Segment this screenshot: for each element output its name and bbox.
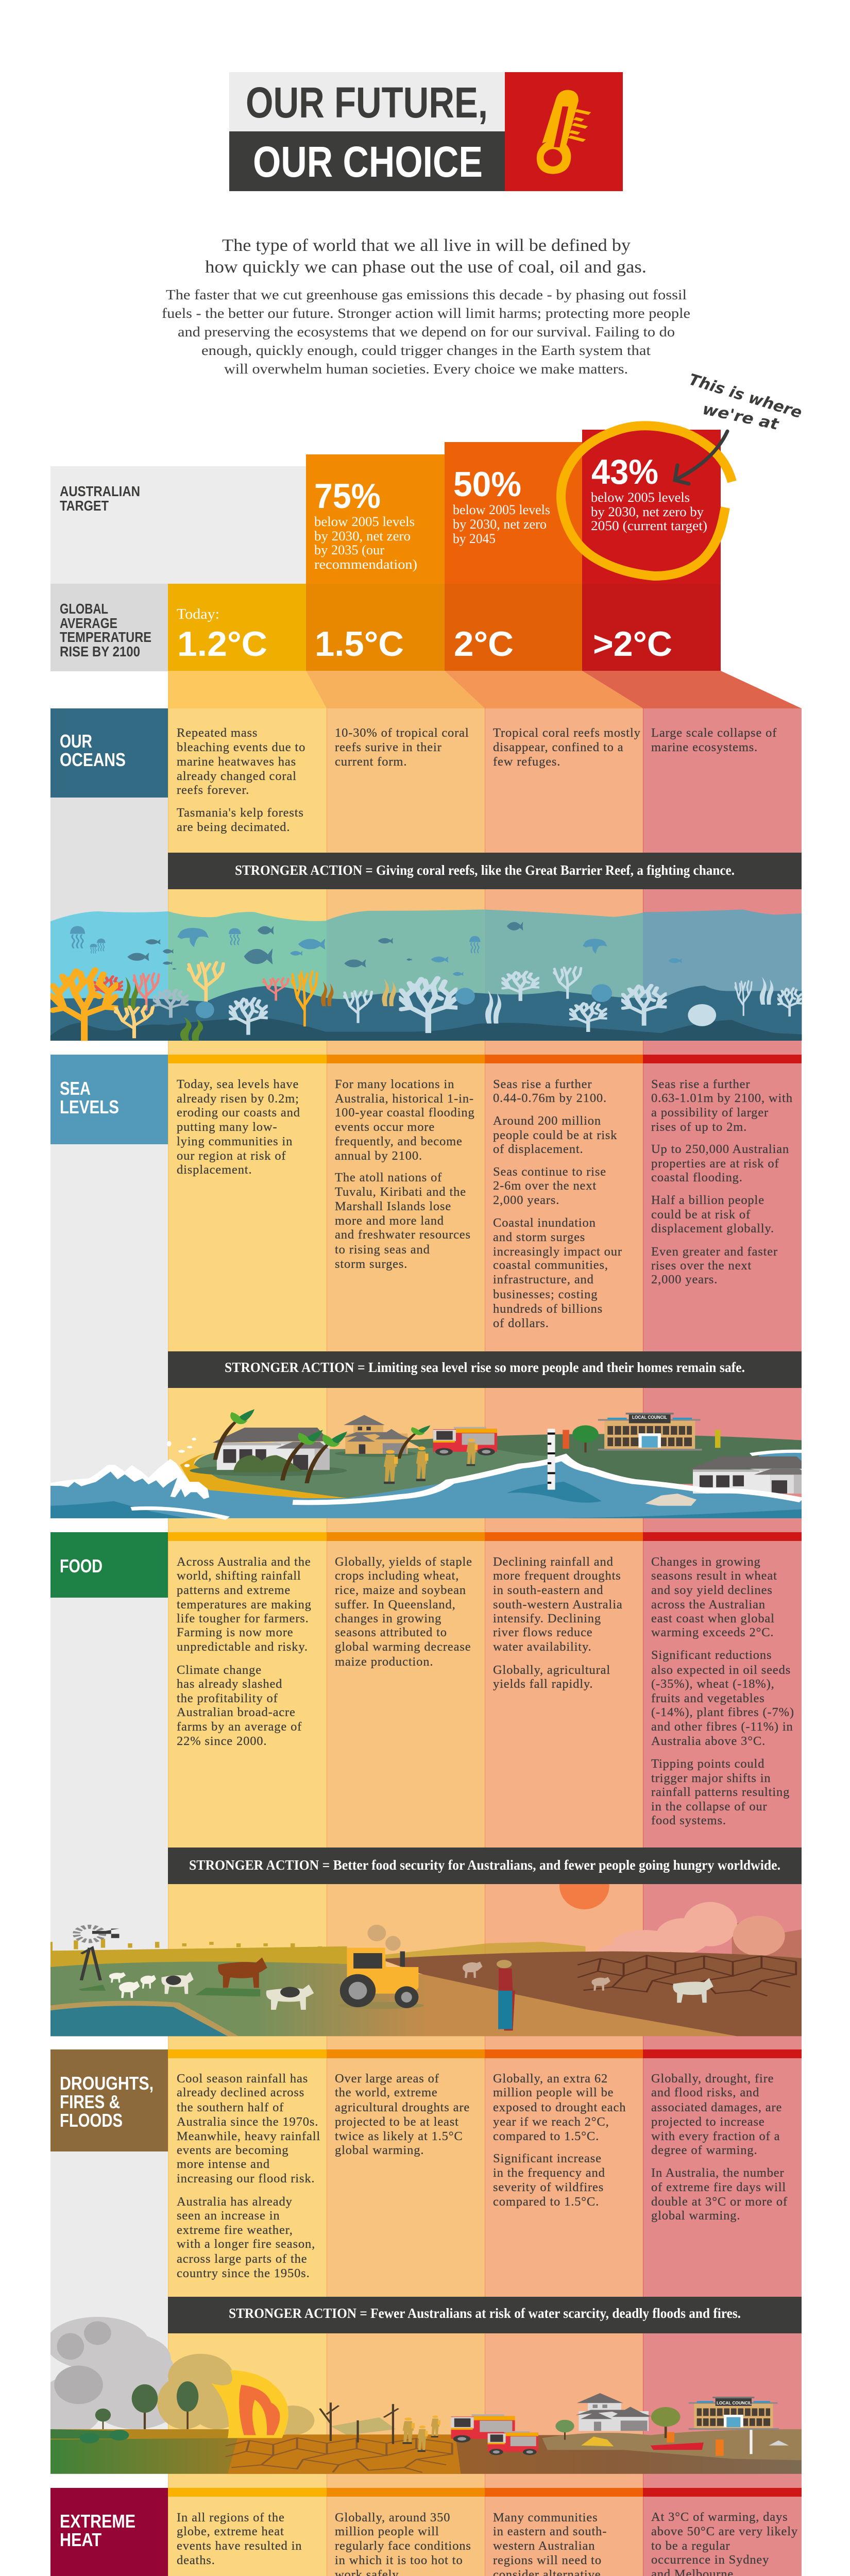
text: oceans today: Repeated mass — [177, 726, 258, 740]
sign: local council: LOCAL COUNCIL — [717, 2401, 752, 2405]
text: sea 1.5: and freshwater resources — [335, 1228, 471, 1242]
text: oceans 2: disappear, confined to a — [493, 740, 623, 754]
text: sea 2: increasingly impact our — [493, 1245, 622, 1259]
text: food above 2: (-14%), plant fibres (-7%) — [651, 1705, 794, 1719]
text: droughts 1.5: twice as likely at 1.5°C — [335, 2129, 463, 2143]
text: food above 2: Significant reductions — [651, 1648, 772, 1662]
text: droughts 1.5: global warming. — [335, 2143, 424, 2157]
text: heat 1.5: million people will — [335, 2524, 439, 2538]
panel: sea levels label: SEA — [60, 1078, 91, 1099]
text: food today: Climate change — [177, 1663, 262, 1677]
text: food 1.5: seasons attributed to — [335, 1625, 447, 1639]
text: droughts above 2: of extreme fire days will — [651, 2180, 786, 2194]
text: droughts above 2: global warming. — [651, 2209, 740, 2223]
text: droughts today: the southern half of — [177, 2100, 284, 2114]
stronger action bar: oceans — [168, 853, 802, 889]
panel: extreme heat label: HEAT — [60, 2529, 101, 2550]
text: sea today: lying communities in — [177, 1134, 293, 1148]
text: sea above 2: Even greater and faster — [651, 1245, 778, 1259]
text: sea 1.5: Australia, historical 1-in- — [335, 1092, 474, 1106]
text: droughts 1.5: Over large areas of — [335, 2072, 439, 2086]
temperature values: 2°C — [454, 624, 514, 664]
intro heading: how quickly we can phase out the use of coal, oil and gas. — [205, 258, 647, 277]
text: droughts above 2: Globally, drought, fire — [651, 2072, 774, 2086]
target: 75%: below 2005 levels — [314, 514, 415, 529]
text: sea 2: 0.44-0.76m by 2100. — [493, 1091, 607, 1105]
target: 50%: below 2005 levels — [453, 502, 550, 517]
illustration: farm to drought — [50, 1884, 802, 2036]
text: oceans today: bleaching events due to — [177, 740, 305, 754]
target: 50%: 50% — [453, 465, 521, 504]
text: food 1.5: maize production. — [335, 1655, 433, 1669]
text: droughts today: with a longer fire season, — [177, 2237, 315, 2251]
text: sea 2: Seas continue to rise — [493, 1165, 606, 1179]
text: sea 1.5: to rising seas and — [335, 1243, 430, 1257]
text: sea 1.5: frequently, and become — [335, 1134, 463, 1148]
panel: our oceans label: OCEANS — [60, 749, 126, 770]
text: heat 1.5: regularly face conditions — [335, 2539, 471, 2553]
text: sea above 2: rises over the next — [651, 1259, 752, 1273]
text: droughts 2: Significant increase — [493, 2151, 602, 2165]
intro heading: The type of world that we all live in will be defined by — [222, 236, 631, 255]
target: 43%: 2050 (current target) — [591, 518, 707, 533]
target: 43% — [591, 452, 707, 533]
text: food 1.5: global warming decrease — [335, 1640, 471, 1654]
text: droughts today: events are becoming — [177, 2143, 289, 2157]
text: droughts today: more intense and — [177, 2157, 270, 2171]
stronger action bar: food: STRONGER ACTION = Better food security for Australians, and fewer people going hungry worldwide. — [189, 1857, 780, 1873]
text: oceans 2: few refuges. — [493, 755, 560, 769]
target: 75% — [314, 477, 417, 572]
text: food today: Australian broad-acre — [177, 1705, 296, 1719]
text: sea today: displacement. — [177, 1163, 252, 1177]
text: sea 2: of dollars. — [493, 1316, 549, 1330]
temperature values: 1.2°C — [177, 624, 267, 664]
panel: droughts fires floods label: FIRES & — [60, 2091, 120, 2112]
text: food 1.5: rice, maize and soybean — [335, 1583, 466, 1597]
stronger action bar: sea levels — [168, 1351, 802, 1388]
text: droughts above 2: and flood risks, and — [651, 2086, 759, 2099]
text: sea 2: infrastructure, and — [493, 1273, 594, 1286]
text: heat above 2: At 3°C of warming, days — [651, 2510, 788, 2524]
text: droughts 2: million people will be — [493, 2086, 614, 2099]
text: oceans 2: Tropical coral reefs mostly — [493, 726, 641, 740]
text: oceans 1.5: 10-30% of tropical coral — [335, 726, 469, 740]
text: droughts 2: in the frequency and — [493, 2166, 605, 2180]
text: food 2: in south-eastern and — [493, 1583, 603, 1597]
intro paragraph: and preserving the ecosystems that we depend on for our survival. Failing to do — [178, 324, 675, 340]
text: droughts above 2: In Australia, the number — [651, 2166, 785, 2180]
label: global average temperature: AVERAGE — [60, 615, 117, 631]
text: oceans 1.5: reefs surive in their — [335, 740, 442, 754]
text: sea above 2: 0.63-1.01m by 2100, with — [651, 1091, 793, 1105]
text: droughts 2: Globally, an extra 62 — [493, 2072, 608, 2086]
text: food 2: south-western Australia — [493, 1598, 623, 1612]
text: sea 2: Seas rise a further — [493, 1077, 592, 1091]
text: oceans 1.5: current form. — [335, 755, 407, 769]
handwritten text: This is where — [687, 370, 804, 422]
text: oceans above 2: Large scale collapse of — [651, 726, 777, 740]
text: food 2: Declining rainfall and — [493, 1555, 614, 1569]
row: australian target — [50, 430, 721, 584]
text: food above 2: Tipping points could — [651, 1757, 764, 1771]
panel: sea levels label — [50, 1055, 168, 1144]
text: droughts today: across large parts of the — [177, 2252, 307, 2266]
text: heat today: globe, extreme heat — [177, 2524, 284, 2538]
text: sea above 2: coastal flooding. — [651, 1171, 743, 1184]
text: droughts above 2: associated damages, are — [651, 2100, 782, 2114]
text: heat above 2: above 50°C are very likely — [651, 2524, 798, 2538]
text: droughts above 2: degree of warming. — [651, 2143, 757, 2157]
left gutters — [50, 798, 168, 2576]
text: food today: temperatures are making — [177, 1598, 312, 1612]
text: food above 2: and other fibres (-11%) in — [651, 1720, 793, 1734]
target: 75%: recommendation) — [314, 557, 417, 572]
illustration: bushfire and flood — [38, 2317, 802, 2474]
text: sea above 2: displacement globally. — [651, 1222, 774, 1235]
target: 43%: by 2030, net zero by — [591, 504, 704, 519]
text: food above 2: across the Australian — [651, 1598, 766, 1612]
text: food 2: river flows reduce — [493, 1625, 593, 1639]
text: food today: the profitability of — [177, 1691, 278, 1705]
text: droughts today: Meanwhile, heavy rainfall — [177, 2129, 320, 2143]
text: oceans today: already changed coral — [177, 769, 297, 783]
text: droughts today: extreme fire weather, — [177, 2223, 293, 2237]
text: heat 2: Many communities — [493, 2511, 598, 2524]
text: sea today: putting many low- — [177, 1120, 277, 1134]
impact columns — [168, 708, 802, 2576]
panel: our oceans label: OUR — [60, 731, 92, 752]
text: food 2: water availability. — [493, 1640, 591, 1654]
label: australian target — [60, 483, 140, 514]
intro paragraph: enough, quickly enough, could trigger changes in the Earth system that — [201, 343, 651, 358]
text: droughts 2: compared to 1.5°C. — [493, 2195, 599, 2209]
text: droughts 2: exposed to drought each — [493, 2100, 626, 2114]
panel: sea levels label: LEVELS — [60, 1096, 119, 1117]
target: 50%: by 2045 — [453, 531, 496, 546]
text: droughts today: country since the 1950s. — [177, 2266, 310, 2280]
text: heat 2: western Australian — [493, 2539, 595, 2553]
text: food above 2: and soy yield declines — [651, 1583, 773, 1597]
text: sea 1.5: more and more land — [335, 1214, 444, 1228]
stronger action bar: droughts — [168, 2297, 802, 2333]
connector trapezoids — [168, 671, 802, 708]
text: sea above 2: Half a billion people — [651, 1193, 764, 1207]
temperature values: 1.5°C — [315, 624, 404, 664]
text: sea 2: 2,000 years. — [493, 1193, 559, 1207]
label: global average temperature: TEMPERATURE — [60, 629, 151, 645]
text: droughts today: Australia since the 1970s. — [177, 2115, 318, 2129]
heading: our future: OUR FUTURE, — [246, 78, 488, 127]
text: heat above 2: to be a regular — [651, 2539, 730, 2553]
yellow hand-drawn circle — [561, 426, 732, 576]
panel: droughts fires floods label: FLOODS — [60, 2110, 123, 2131]
text: sea 2: hundreds of billions — [493, 1302, 603, 1316]
panel: our oceans label — [50, 708, 168, 798]
target: 43%: 43% — [591, 452, 658, 492]
stronger action bar: droughts: STRONGER ACTION = Fewer Australians at risk of water scarcity, deadly floods and fires. — [229, 2306, 741, 2321]
panel: extreme heat label: EXTREME — [60, 2511, 135, 2532]
text: food 2: Globally, agricultural — [493, 1663, 610, 1677]
target: 75%: 75% — [314, 477, 381, 516]
text: droughts today: increasing our flood risk. — [177, 2172, 315, 2185]
text: food today: patterns and extreme — [177, 1583, 291, 1597]
text: sea 1.5: Tuvalu, Kiribati and the — [335, 1185, 466, 1199]
text: droughts above 2: projected to increase — [651, 2115, 765, 2129]
text: droughts 2: compared to 1.5°C. — [493, 2129, 599, 2143]
text: food 2: intensify. Declining — [493, 1612, 601, 1625]
text: food above 2: Australia above 3°C. — [651, 1734, 766, 1748]
text: droughts today: Cool season rainfall has — [177, 2072, 308, 2086]
text: droughts today: Australia has already — [177, 2195, 293, 2209]
text: food 1.5: changes in growing — [335, 1612, 441, 1625]
text: sea 2: coastal communities, — [493, 1258, 608, 1272]
text: food today: Across Australia and the — [177, 1555, 311, 1569]
text: oceans today: are being decimated. — [177, 820, 290, 834]
illustration: ocean reef — [50, 904, 802, 1044]
text: food above 2: warming exceeds 2°C. — [651, 1625, 774, 1639]
text: sea 2: businesses; costing — [493, 1287, 598, 1301]
text: sea above 2: Seas rise a further — [651, 1077, 750, 1091]
text: food above 2: in the collapse of our — [651, 1800, 768, 1814]
target: 75%: by 2035 (our — [314, 543, 384, 557]
temperature values — [177, 624, 672, 664]
text: food above 2: (-35%), wheat (-18%), — [651, 1677, 775, 1691]
arrow — [675, 431, 727, 484]
text: sea 1.5: For many locations in — [335, 1077, 454, 1091]
text: food today: has already slashed — [177, 1677, 282, 1691]
text: oceans today: reefs forever. — [177, 783, 249, 797]
target: 50%: by 2030, net zero — [453, 517, 547, 532]
text: oceans today: marine heatwaves has — [177, 755, 296, 769]
text: sea 1.5: storm surges. — [335, 1257, 407, 1271]
text: food above 2: fruits and vegetables — [651, 1691, 765, 1705]
text: sea 2: Around 200 million — [493, 1114, 601, 1128]
temperature values: >2°C — [593, 624, 672, 664]
row: global temperature rise — [50, 584, 721, 671]
text: food 1.5: Globally, yields of staple — [335, 1555, 472, 1569]
text: sea above 2: could be at risk of — [651, 1208, 751, 1222]
text: droughts above 2: with every fraction of a — [651, 2129, 780, 2143]
intro paragraph: will overwhelm human societies. Every choice we make matters. — [224, 361, 628, 377]
text: sea 2: of displacement. — [493, 1142, 584, 1156]
text: food 2: yields fall rapidly. — [493, 1677, 593, 1691]
text: sea 1.5: Marshall Islands lose — [335, 1199, 451, 1213]
label: global average temperature: RISE BY 2100 — [60, 643, 140, 659]
sign: local council: LOCAL COUNCIL — [632, 1415, 667, 1420]
text: sea 1.5: events occur more — [335, 1120, 435, 1134]
text: food 2: more frequent droughts — [493, 1569, 621, 1583]
text: droughts today: already declined across — [177, 2086, 304, 2099]
text: droughts above 2: double at 3°C or more of — [651, 2195, 788, 2209]
colour stripes — [168, 1055, 802, 2497]
text: food today: unpredictable and risky. — [177, 1640, 308, 1654]
text: sea 2: people could be at risk — [493, 1128, 617, 1142]
text: heat 1.5: in which it is too hot to — [335, 2553, 463, 2567]
text: food 1.5: crops including wheat, — [335, 1569, 459, 1583]
today label: Today: — [177, 606, 219, 622]
text: sea above 2: 2,000 years. — [651, 1273, 718, 1286]
text: food above 2: seasons result in wheat — [651, 1569, 777, 1583]
text: food above 2: also expected in oil seeds — [651, 1663, 791, 1677]
callout: this is where we're at — [561, 370, 804, 576]
text: food today: 22% since 2000. — [177, 1734, 267, 1748]
text: sea 2: Coastal inundation — [493, 1216, 596, 1230]
intro paragraph: The faster that we cut greenhouse gas emissions this decade - by phasing out fossil — [166, 287, 687, 302]
panel: droughts fires floods label: DROUGHTS, — [60, 2073, 154, 2094]
text: heat today: events have resulted in — [177, 2539, 302, 2553]
label: global average temperature: GLOBAL — [60, 601, 108, 617]
panel: extreme heat label — [50, 2488, 168, 2576]
target: 50% — [453, 465, 550, 546]
text: food today: farms by an average of — [177, 1720, 302, 1734]
text: heat above 2: occurrence in Sydney — [651, 2553, 769, 2567]
panel: food label: FOOD — [60, 1555, 103, 1577]
text: oceans above 2: marine ecosystems. — [651, 740, 758, 754]
text: sea today: Today, sea levels have — [177, 1077, 299, 1091]
text: droughts 1.5: projected to be at least — [335, 2115, 459, 2129]
text: sea above 2: a possibility of larger — [651, 1106, 769, 1120]
text: sea 1.5: The atoll nations of — [335, 1171, 442, 1184]
text: heat today: In all regions of the — [177, 2511, 285, 2524]
text: sea today: eroding our coasts and — [177, 1106, 300, 1120]
text: food today: Farming is now more — [177, 1625, 293, 1639]
text: sea 1.5: 100-year coastal flooding — [335, 1106, 475, 1120]
panel: droughts fires floods label — [50, 2049, 168, 2151]
label: global average temperature — [60, 601, 151, 659]
text: sea 1.5: annual by 2100. — [335, 1149, 422, 1163]
text: sea 2: and storm surges — [493, 1230, 585, 1244]
text: food today: world, shifting rainfall — [177, 1569, 301, 1583]
text: heat 2: in eastern and south- — [493, 2524, 607, 2538]
text: food above 2: food systems. — [651, 1814, 726, 1827]
text: oceans today: Tasmania's kelp forests — [177, 806, 304, 820]
text: food today: life tougher for farmers. — [177, 1612, 309, 1625]
target: 43%: below 2005 levels — [591, 490, 690, 505]
text: sea today: already risen by 0.2m; — [177, 1092, 299, 1106]
text: food 1.5: suffer. In Queensland, — [335, 1598, 456, 1612]
stronger action bar: oceans: STRONGER ACTION = Giving coral reefs, like the Great Barrier Reef, a fighting chance. — [235, 862, 735, 878]
text: food above 2: Changes in growing — [651, 1555, 761, 1569]
text: droughts 1.5: the world, extreme — [335, 2086, 438, 2099]
panel: food label — [50, 1532, 168, 1598]
handwritten text: we're at — [701, 400, 781, 434]
intro heading — [205, 236, 647, 277]
stronger action bar: food — [168, 1848, 802, 1884]
heading: our choice: OUR CHOICE — [253, 138, 483, 186]
label: australian target: TARGET — [60, 498, 109, 514]
text: droughts 2: severity of wildfires — [493, 2180, 604, 2194]
stronger action bar: sea levels: STRONGER ACTION = Limiting sea level rise so more people and their homes remain safe. — [225, 1360, 745, 1375]
text: sea today: our region at risk of — [177, 1149, 286, 1163]
text: sea above 2: rises of up to 2m. — [651, 1120, 747, 1134]
text: sea 2: 2-6m over the next — [493, 1179, 597, 1193]
title banner — [229, 72, 623, 191]
label: australian target: AUSTRALIAN — [60, 483, 140, 499]
text: droughts today: seen an increase in — [177, 2209, 280, 2223]
text: droughts 2: year if we reach 2°C, — [493, 2115, 609, 2129]
intro paragraph — [162, 287, 690, 377]
text: droughts 1.5: agricultural droughts are — [335, 2100, 470, 2114]
text: food above 2: rainfall patterns resulting — [651, 1785, 790, 1799]
intro paragraph: fuels - the better our future. Stronger action will limit harms; protecting more people — [162, 306, 690, 321]
text: heat 1.5: Globally, around 350 — [335, 2511, 450, 2524]
icon: thermometer — [537, 90, 590, 174]
text: sea above 2: Up to 250,000 Australian — [651, 1142, 789, 1156]
illustration: flooding town — [50, 1409, 809, 1518]
text: heat 2: regions will need to — [493, 2553, 602, 2567]
text: sea above 2: properties are at risk of — [651, 1157, 779, 1171]
target: 75%: by 2030, net zero — [314, 529, 411, 544]
text: food above 2: trigger major shifts in — [651, 1771, 771, 1785]
text: food above 2: east coast when global — [651, 1612, 775, 1625]
text: heat today: deaths. — [177, 2553, 215, 2567]
